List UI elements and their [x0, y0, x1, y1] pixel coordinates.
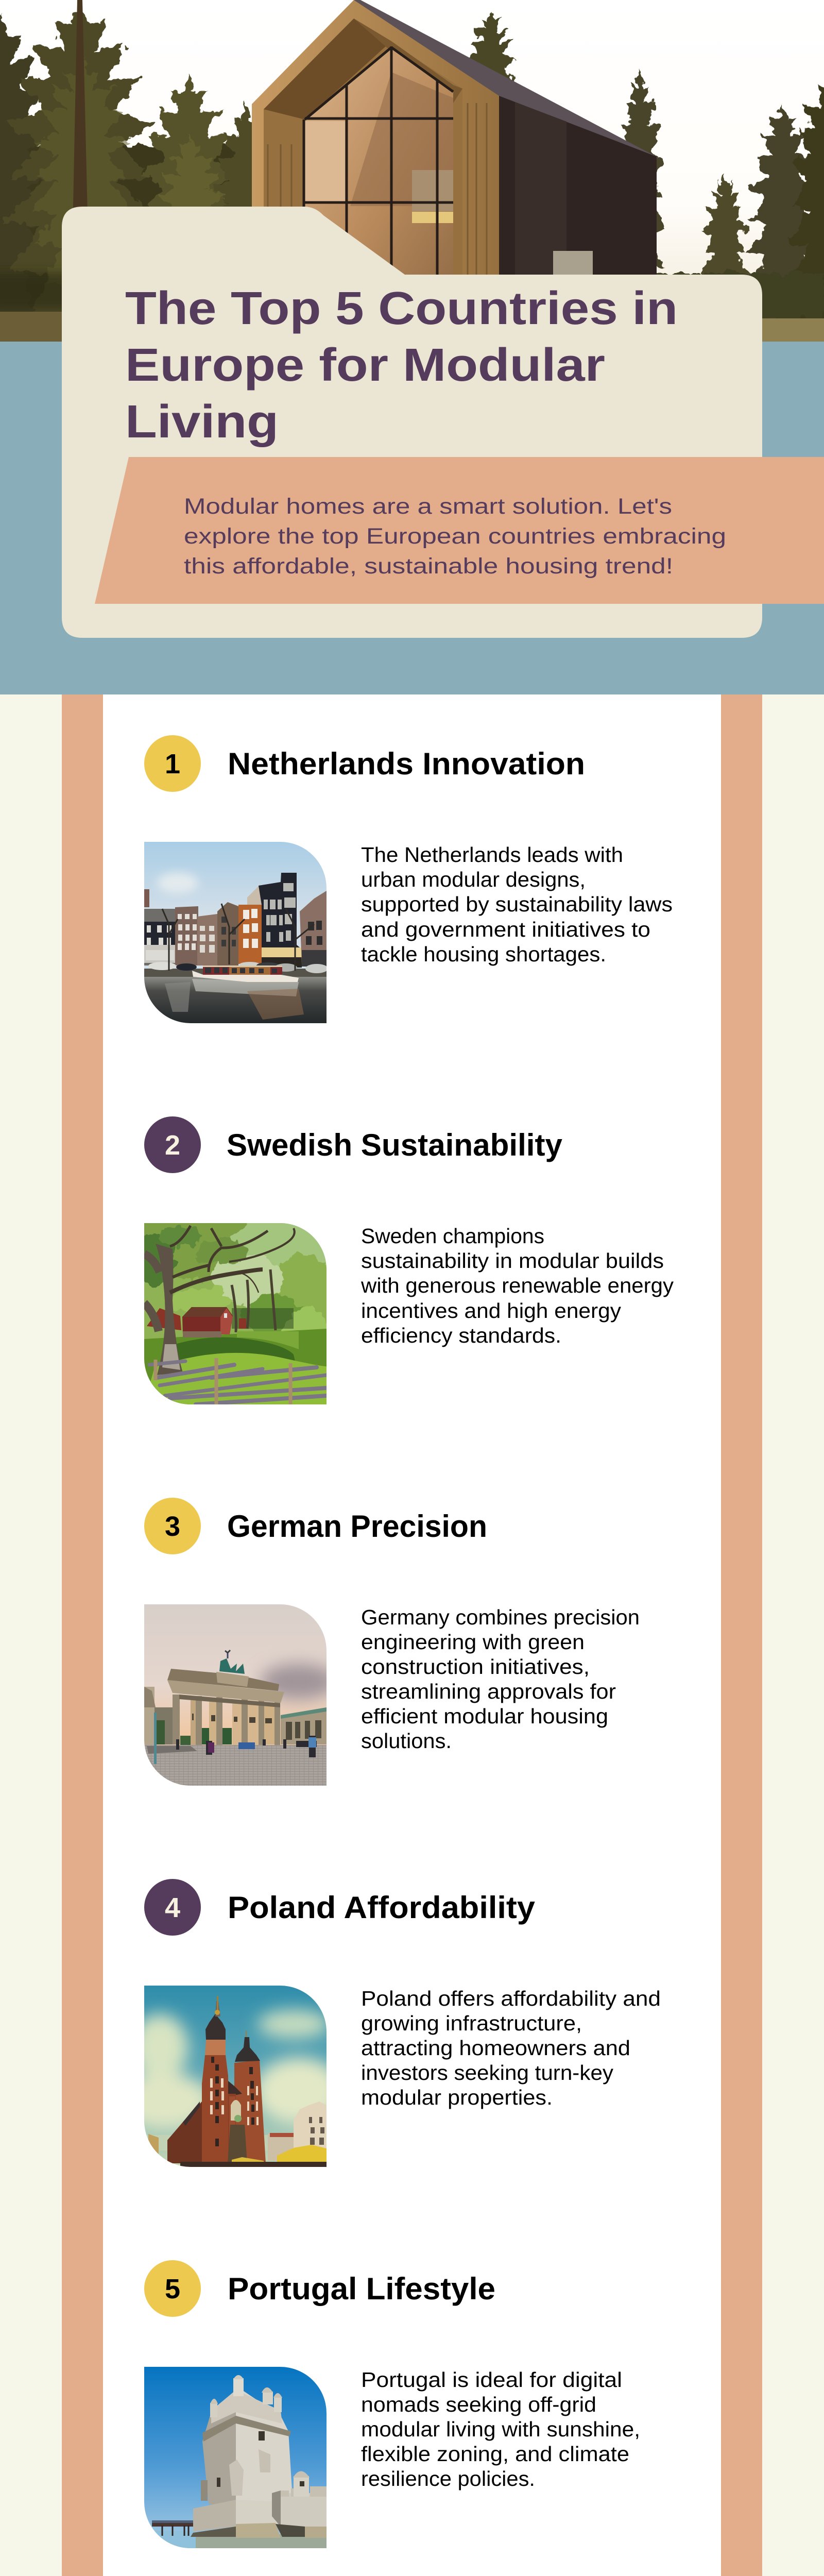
body text: efficiency standards. [361, 1324, 561, 1347]
body text [361, 1605, 640, 1753]
number badge 1: 1 [165, 749, 180, 779]
body text: flexible zoning, and climate [361, 2442, 629, 2466]
number badge 2 [144, 1116, 201, 1173]
body text: and government initiatives to [361, 918, 650, 941]
body text: with generous renewable energy [360, 1274, 674, 1297]
body text: supported by sustainability laws [361, 892, 673, 916]
title: Europe for Modular [125, 340, 605, 391]
body text: efficient modular housing [361, 1704, 608, 1728]
section 5: Portugal [144, 2260, 640, 2548]
teal banner background [0, 342, 824, 694]
body text: Portugal is ideal for digital [361, 2368, 622, 2392]
number badge 1 [144, 735, 201, 792]
body text: Germany combines precision [361, 1605, 640, 1629]
body text [361, 1987, 661, 2109]
body text: investors seeking turn-key [361, 2061, 614, 2084]
body text: construction initiatives, [361, 1655, 590, 1679]
body text [360, 1224, 674, 1347]
intro ribbon [95, 457, 824, 604]
body text [361, 2368, 640, 2490]
cabin building [252, 0, 658, 309]
body text: streamlining approvals for [361, 1680, 616, 1703]
section 3: Germany [144, 1498, 640, 1786]
heading: Poland Affordability [228, 1890, 536, 1925]
heading: Netherlands Innovation [228, 747, 585, 781]
body text [361, 843, 673, 966]
title: The Top 5 Countries in [125, 283, 678, 334]
intro text [184, 494, 726, 579]
body text: incentives and high energy [361, 1299, 622, 1323]
body text: engineering with green [361, 1630, 585, 1654]
intro text: this affordable, sustainable housing trend! [184, 554, 673, 579]
body text: The Netherlands leads with [361, 843, 623, 867]
body text: growing infrastructure, [361, 2011, 582, 2035]
photo: St Mary's Basilica Krakow [144, 1986, 327, 2167]
section 1: Netherlands [144, 735, 673, 1023]
body text: modular living with sunshine, [361, 2417, 640, 2441]
photo: red barn and oak [144, 1223, 327, 1404]
body text: solutions. [361, 1729, 452, 1753]
hero photo: modular cabin among pines [0, 0, 824, 342]
body text: modular properties. [361, 2086, 553, 2109]
content column with salmon rails [62, 694, 762, 2576]
number badge 4: 4 [165, 1892, 180, 1923]
number badge 3: 3 [165, 1511, 180, 1542]
body text: Poland offers affordability and [361, 1987, 661, 2010]
number badge 2: 2 [165, 1130, 180, 1161]
body text: tackle housing shortages. [361, 942, 606, 966]
number badge 3 [144, 1498, 201, 1554]
title: Living [125, 396, 279, 448]
body text: attracting homeowners and [361, 2036, 630, 2060]
body text: Sweden champions [361, 1224, 544, 1248]
photo: Amsterdam canal houses [144, 842, 328, 1023]
section 2: Sweden [129, 1116, 674, 1404]
section 4: Poland [118, 1879, 661, 2167]
intro text: explore the top European countries embracing [184, 524, 726, 549]
heading: German Precision [227, 1509, 487, 1544]
heading: Swedish Sustainability [227, 1128, 563, 1162]
title [125, 283, 678, 448]
body text: sustainability in modular builds [361, 1249, 664, 1273]
intro text: Modular homes are a smart solution. Let's [184, 494, 672, 519]
number badge 5: 5 [165, 2274, 180, 2304]
photo: Belem Tower Lisbon [144, 2367, 327, 2548]
heading: Portugal Lifestyle [228, 2272, 495, 2306]
number badge 5 [144, 2260, 201, 2317]
body text: resilience policies. [361, 2467, 535, 2490]
body text: nomads seeking off-grid [361, 2393, 596, 2416]
body text: urban modular designs, [361, 868, 586, 891]
title card [62, 207, 762, 638]
photo: Brandenburg Gate [144, 1604, 337, 1786]
number badge 4 [144, 1879, 201, 1936]
